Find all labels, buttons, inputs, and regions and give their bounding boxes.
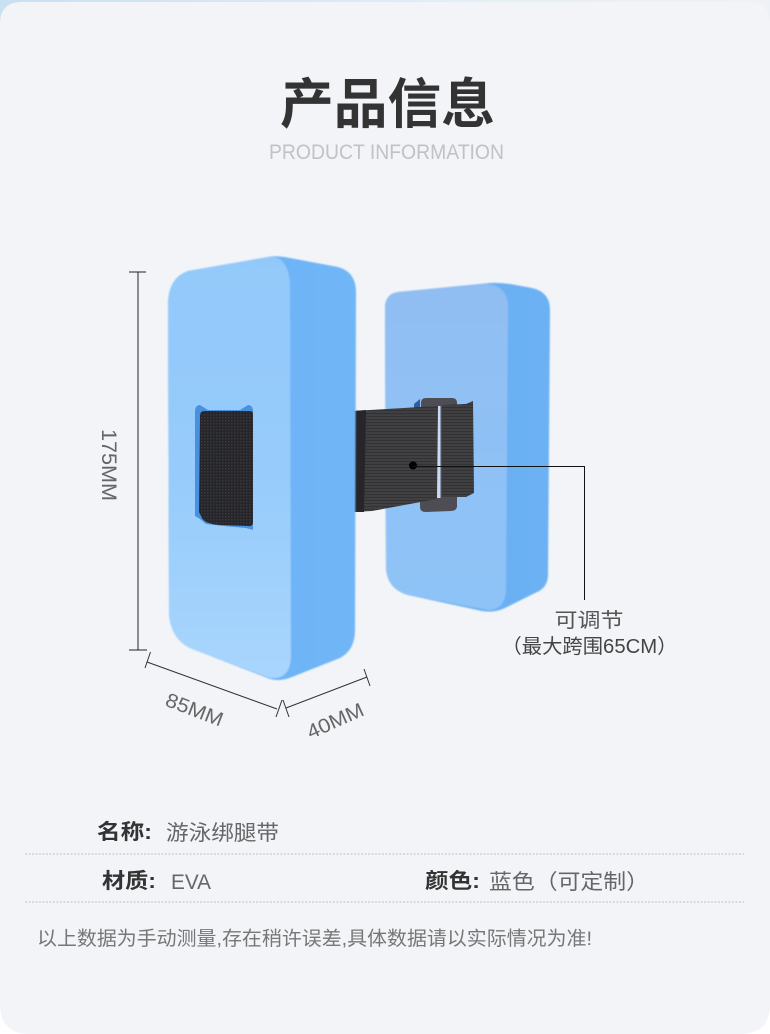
title: 产品信息	[280, 75, 495, 135]
spec row: colour: 颜色:	[425, 870, 480, 893]
callout label	[502, 609, 678, 658]
dimension: width 85MM	[145, 652, 282, 731]
spec row: material: 材质:	[102, 870, 156, 893]
strap slot	[195, 405, 253, 530]
connecting strap and buckle	[353, 398, 474, 512]
spec row: colour	[425, 870, 649, 894]
spec row: material: EVA	[171, 871, 211, 894]
spec row: colour: 蓝色（可定制）	[489, 871, 649, 894]
callout label: （最大跨围65CM）	[502, 635, 678, 658]
callout label: 可调节	[554, 609, 624, 632]
dimension: depth 40MM	[283, 669, 370, 744]
right foam block	[385, 283, 550, 612]
dimension: height 175MM	[97, 272, 147, 650]
subtitle: PRODUCT INFORMATION	[269, 141, 504, 164]
divider	[25, 901, 744, 903]
spec row: name: 游泳绑腿带	[166, 822, 279, 845]
spec row: name	[97, 821, 279, 845]
left foam block	[168, 256, 356, 680]
dimension: width 85MM: 85MM	[162, 689, 226, 731]
dimension: height 175MM: 175MM	[97, 429, 120, 501]
dimension: depth 40MM: 40MM	[304, 699, 367, 744]
divider	[25, 853, 744, 855]
spec row: name: 名称:	[97, 821, 152, 844]
spec row: material	[102, 870, 211, 894]
disclaimer note: 以上数据为手动测量,存在稍许误差,具体数据请以实际情况为准!	[37, 928, 592, 950]
product: foam leg float with strap	[168, 256, 550, 680]
callout: adjustable strap leader line	[409, 462, 584, 600]
